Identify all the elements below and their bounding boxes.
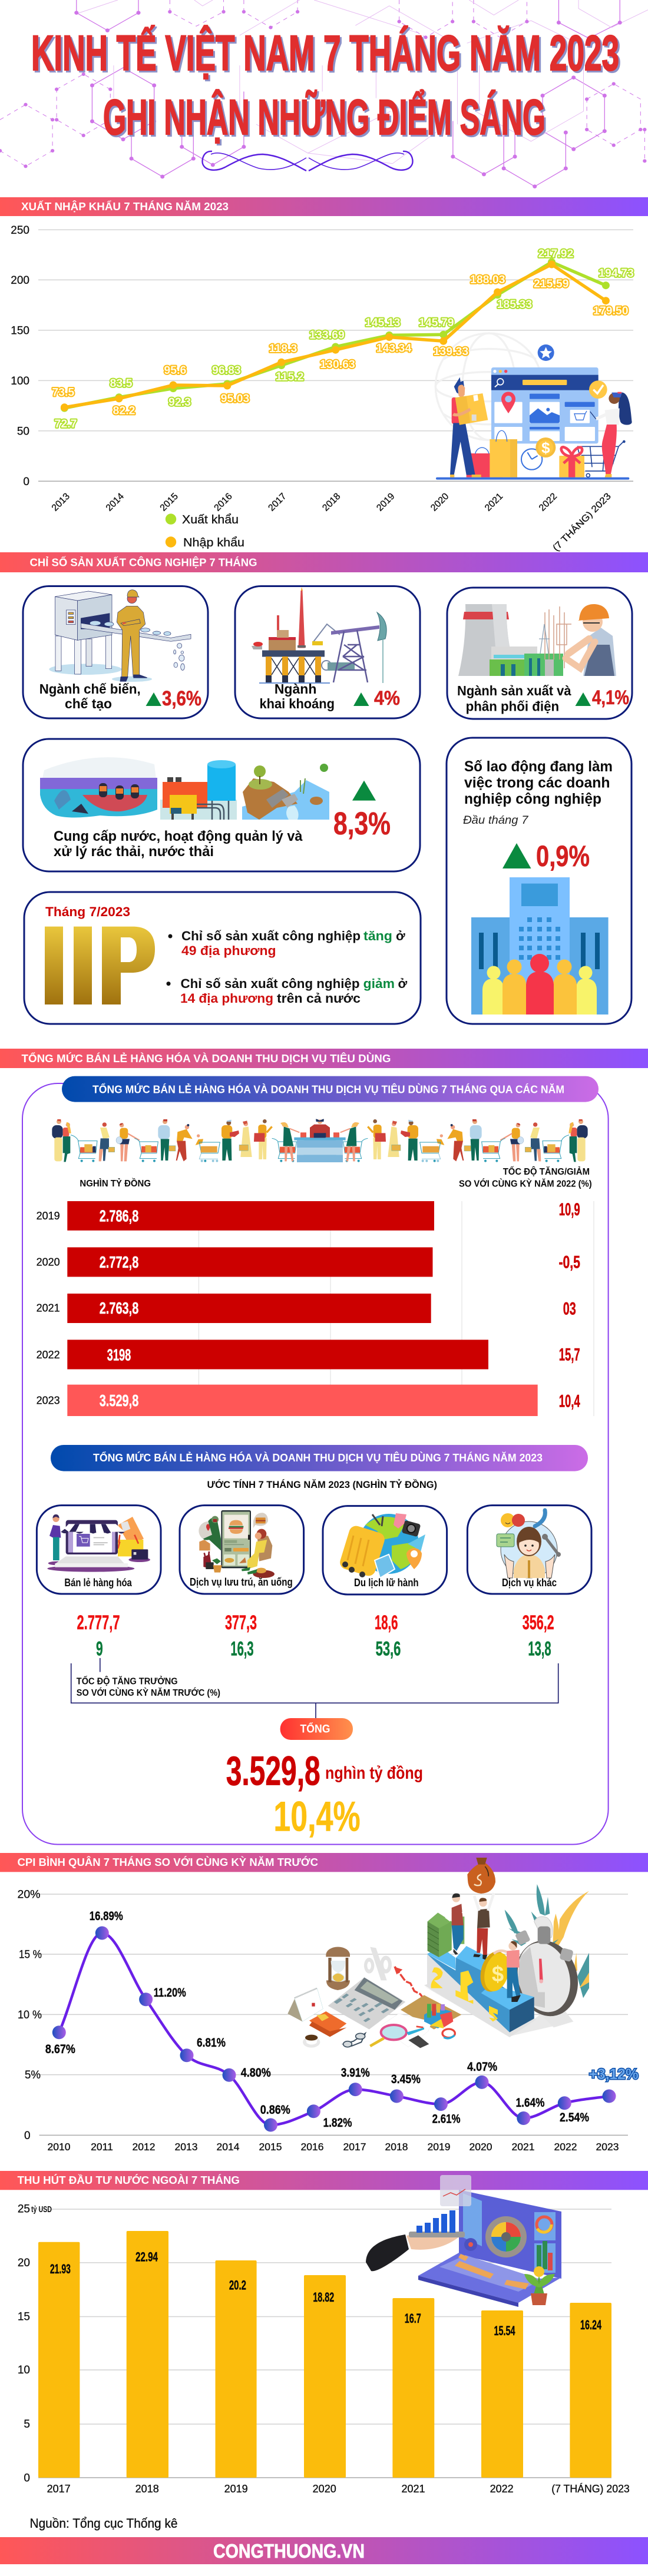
growth: 4,1%: 4,1% — [592, 687, 629, 709]
axis title: unit: NGHÌN TỶ ĐỒNG — [80, 1178, 151, 1189]
import value labels: 139.33 — [434, 345, 468, 358]
bar 2019: 10,9 — [559, 1200, 580, 1219]
title — [31, 25, 621, 147]
CPI year labels: 2011 — [91, 2141, 113, 2153]
import value labels: 95.6 — [164, 364, 187, 377]
chart grid and y axis: 250 — [11, 224, 29, 237]
panel: retail revenue — [22, 1076, 609, 1844]
note: growth rate: TỐC ĐỘ TĂNG TRƯỞNG — [77, 1676, 178, 1686]
panel: water and waste — [23, 739, 420, 871]
text: employment heading — [464, 758, 613, 807]
bar chart: FDI — [18, 2175, 630, 2495]
values: revenue by group: 18,6 — [375, 1612, 398, 1634]
text: manufacturing label: Ngành chế biến, — [39, 681, 141, 697]
chart grid and y axis: 0 — [23, 476, 29, 488]
CPI year labels: 2017 — [343, 2141, 366, 2153]
card: other services — [467, 1506, 591, 1594]
export value labels: 194.73 — [599, 267, 634, 280]
chart grid and y axis: 5 — [24, 2418, 30, 2431]
text: electricity label — [457, 683, 571, 714]
CPI value labels: 6.81% — [197, 2036, 226, 2050]
illustration: finance podium: $ — [492, 1962, 504, 1986]
CPI value labels: 11.20% — [154, 1986, 186, 2000]
heading pill: 2023 retail — [51, 1445, 588, 1471]
heading pill: yearly retail — [62, 1076, 599, 1102]
section header: bán lẻ — [0, 1049, 648, 1068]
CPI value labels: 3.45% — [391, 2073, 421, 2086]
FDI year labels: 2019 — [224, 2483, 248, 2495]
year axis labels: 2021 — [483, 491, 505, 513]
panel: IIP by locality — [24, 892, 421, 1024]
bar 2023: 3.529,8 — [100, 1391, 138, 1410]
text: employment heading: nghiệp công nghiệp — [464, 791, 601, 807]
bullet: provinces falling: trên cả nước — [277, 991, 361, 1006]
year axis labels: 2015 — [158, 491, 180, 513]
export value labels: 83.5 — [110, 377, 133, 390]
section header: CPI — [0, 1853, 648, 1872]
export value labels: 72.7 — [55, 417, 77, 430]
text: water and waste label — [54, 828, 303, 860]
total value: 3.529,8 — [226, 1748, 320, 1794]
CPI year labels: 2015 — [259, 2141, 282, 2153]
import value labels: 215.59 — [534, 277, 569, 290]
total pill — [280, 1718, 353, 1740]
connector bracket — [71, 1658, 558, 1718]
section header: bán lẻ: TỔNG MỨC BÁN LẺ HÀNG HÓA VÀ DOANH THU DỊCH VỤ TIÊU DÙNG — [21, 1052, 391, 1065]
bullet: provinces falling: ở — [398, 976, 408, 991]
values: revenue by group: 2.777,7 — [77, 1612, 120, 1634]
text: manufacturing label: chế tạo — [65, 696, 112, 711]
year axis labels: 2019 — [375, 491, 397, 513]
year axis labels: 2017 — [266, 491, 289, 513]
FDI value labels: 22.94 — [135, 2249, 158, 2264]
bar 2020: 2020 — [37, 1256, 60, 1268]
bar 2023 — [37, 1385, 580, 1416]
CPI value labels — [45, 1909, 639, 2130]
icon: oil rig and pump jack — [252, 587, 386, 683]
CPI year labels: 2013 — [175, 2141, 197, 2153]
bullet: provinces falling: 14 địa phương — [180, 991, 273, 1006]
section header: xuất nhập khẩu — [0, 197, 648, 216]
text: electricity label: phân phối điện — [466, 698, 559, 714]
growth: 4,1% — [575, 687, 629, 709]
bullet: provinces falling: Chỉ số sản xuất công nghiệp — [180, 976, 359, 991]
CPI value labels: 4.80% — [241, 2066, 271, 2080]
growth: 8,3% — [333, 781, 391, 841]
growth: 3,6%: 3,6% — [162, 687, 201, 710]
bar 2022: 2022 — [37, 1349, 60, 1361]
text: tourism label: Du lịch lữ hành — [354, 1577, 419, 1589]
bar 2022 — [37, 1340, 580, 1370]
CPI year labels: 2020 — [470, 2141, 492, 2153]
values: revenue by group: 377,3 — [225, 1612, 257, 1634]
subheading: ƯỚC TÍNH 7 THÁNG NĂM 2023 (NGHÌN TỶ ĐỒNG) — [207, 1479, 437, 1490]
CPI year labels: 2022 — [554, 2141, 577, 2153]
card: tourism — [323, 1506, 447, 1594]
bar 2021: 03 — [563, 1299, 576, 1319]
bullet: provinces rising: ở — [396, 929, 405, 943]
CPI value labels: 2.54% — [560, 2111, 589, 2124]
text: water and waste label: xử lý rác thải, nước thải — [54, 844, 214, 860]
icon: office building and workers — [471, 877, 609, 1015]
text: accommodation label: Dịch vụ lưu trú, ăn uống — [190, 1576, 293, 1588]
values: growth by group — [96, 1638, 551, 1660]
chart grid and y axis: 5% — [25, 2069, 41, 2081]
growth: 0,9%: 0,9% — [536, 840, 590, 873]
chart grid and y axis: 0 — [24, 2130, 31, 2142]
growth: 8,3%: 8,3% — [333, 806, 391, 841]
chart grid and y axis: 20% — [18, 1889, 41, 1901]
FDI value labels — [50, 2249, 601, 2338]
import value labels: 188.03 — [470, 273, 505, 286]
panel: industrial employment — [447, 738, 632, 1024]
total growth: 10,4% — [273, 1794, 361, 1841]
FDI bars — [38, 2231, 611, 2478]
import value labels: 118.3 — [269, 342, 297, 355]
year axis labels — [50, 490, 613, 553]
year axis labels: 2013 — [50, 491, 72, 513]
import value labels — [52, 273, 629, 417]
illustration: laptop analytics — [366, 2175, 561, 2307]
import value labels: 179.50 — [593, 304, 629, 317]
chart grid and y axis: 150 — [11, 325, 29, 337]
export value labels: 145.79 — [419, 316, 454, 329]
export line — [61, 258, 610, 412]
illustration: shoppers queue — [52, 1119, 588, 1162]
icon: conveyor worker — [49, 590, 191, 682]
export value labels: 145.13 — [365, 316, 401, 329]
import line — [61, 260, 610, 411]
panel: electricity — [447, 588, 632, 719]
legend: Xuất khẩu — [182, 513, 239, 526]
text: mining label: Ngành — [275, 681, 316, 697]
bullet: provinces rising: tăng — [363, 929, 392, 943]
bullet: provinces rising — [168, 929, 405, 958]
chart grid and y axis: 200 — [11, 274, 29, 287]
CPI line — [59, 1933, 609, 2125]
card: retail goods — [37, 1506, 161, 1594]
title flourish — [203, 151, 412, 171]
bar 2020: 2.772,8 — [100, 1253, 138, 1271]
text: month: Tháng 7/2023 — [45, 904, 130, 919]
growth: 4% — [353, 687, 400, 710]
FDI year labels: 2022 — [490, 2483, 514, 2495]
CPI year labels: 2023 — [596, 2141, 619, 2153]
bar 2021: 2021 — [37, 1302, 60, 1314]
bar 2022: 15,7 — [559, 1345, 580, 1365]
CPI year labels: 2018 — [385, 2141, 408, 2153]
import value labels: 143.34 — [376, 342, 411, 354]
import value labels: 82.2 — [113, 404, 135, 417]
CPI year labels — [48, 2141, 619, 2153]
text: water and waste label: Cung cấp nước, hoạt động quản lý và — [54, 828, 303, 844]
illustration: finance podium — [287, 1858, 589, 2048]
FDI year labels: 2018 — [135, 2483, 159, 2495]
bar 2019: 2.786,8 — [100, 1207, 138, 1225]
FDI value labels: 21.93 — [50, 2262, 71, 2276]
FDI value labels: 16.24 — [580, 2318, 601, 2332]
FDI value labels: 16.7 — [405, 2311, 421, 2326]
CPI data points — [52, 1927, 616, 2131]
section header: FDI: THU HÚT ĐẦU TƯ NƯỚC NGOÀI 7 THÁNG — [18, 2174, 240, 2186]
bar 2023: 2023 — [37, 1394, 60, 1406]
growth: 3,6% — [146, 687, 201, 710]
axis title: growth rate: SO VỚI CÙNG KỲ NĂM 2022 (%) — [459, 1179, 592, 1189]
year axis labels: 2022 — [537, 491, 559, 513]
section header: FDI — [0, 2171, 648, 2190]
FDI year labels: 2021 — [401, 2483, 425, 2495]
year axis labels: (7 THÁNG) 2023 — [550, 490, 613, 553]
text: mining label: khai khoáng — [259, 696, 335, 711]
bullet: provinces rising: 49 địa phương — [181, 943, 276, 958]
year axis labels: 2014 — [104, 491, 126, 513]
line chart: export and import — [11, 224, 634, 553]
panel: mining — [235, 586, 420, 718]
import value labels: 95.03 — [221, 392, 250, 405]
export value labels: 92.3 — [168, 396, 191, 409]
icon: treatment plant — [160, 760, 237, 820]
bar 2021: 2.763,8 — [100, 1299, 138, 1317]
total value — [226, 1748, 423, 1794]
chart grid and y axis: 50 — [17, 425, 29, 438]
CPI year labels: 2012 — [133, 2141, 155, 2153]
bar 2019: 2019 — [37, 1210, 60, 1222]
CPI value labels: 16.89% — [90, 1909, 123, 1923]
card: accommodation and food — [180, 1506, 304, 1594]
heading pill: yearly retail: TỔNG MỨC BÁN LẺ HÀNG HÓA VÀ DOANH THU DỊCH VỤ TIÊU DÙNG 7 THÁNG QUA CÁC NĂM — [92, 1083, 564, 1095]
CPI value labels: 8.67% — [45, 2043, 75, 2056]
CPI year labels: 2021 — [512, 2141, 534, 2153]
FDI year labels — [47, 2483, 630, 2495]
export value labels: 185.33 — [497, 298, 532, 311]
FDI year labels: 2020 — [313, 2483, 336, 2495]
bar 2023: 10,4 — [559, 1392, 580, 1411]
section header: xuất nhập khẩu: XUẤT NHẬP KHẨU 7 THÁNG NĂM 2023 — [21, 200, 229, 213]
icon: food delivery app — [199, 1510, 275, 1578]
export value labels: 217.92 — [538, 247, 573, 260]
bar 2019 — [37, 1200, 580, 1231]
export value labels: 115.2 — [276, 370, 304, 383]
text: other services label: Dịch vụ khác — [502, 1577, 557, 1589]
year axis labels: 2020 — [429, 491, 451, 513]
section header: chỉ số sản xuất công nghiệp — [0, 552, 648, 572]
FDI value labels: 20.2 — [229, 2278, 246, 2293]
CPI value labels: 4.07% — [467, 2060, 497, 2074]
IIP lettering — [45, 927, 155, 1004]
chart grid and y axis — [18, 1889, 628, 2142]
text: period note: Đầu tháng 7 — [463, 814, 529, 827]
chart grid and y axis: 15 % — [19, 1949, 42, 1961]
axis title: growth rate: TỐC ĐỘ TĂNG/GIẢM — [503, 1166, 590, 1177]
chart grid and y axis — [11, 224, 633, 488]
CPI year labels: 2019 — [428, 2141, 450, 2153]
panel: manufacturing — [23, 586, 208, 718]
bullet: provinces falling: giảm — [363, 976, 395, 991]
chart grid and y axis: tỷ USD — [31, 2204, 52, 2214]
CPI year labels: 2014 — [217, 2141, 240, 2153]
export value labels: 133.69 — [309, 329, 345, 342]
bar 2022: 3198 — [107, 1346, 131, 1364]
section header: CPI: CPI BÌNH QUÂN 7 THÁNG SO VỚI CÙNG KỲ NĂM TRƯỚC — [18, 1856, 318, 1868]
bullet: provinces falling — [166, 976, 408, 1006]
legend — [166, 513, 244, 549]
import value labels: 73.5 — [52, 386, 74, 399]
values: growth by group: 9 — [96, 1638, 103, 1660]
chart grid and y axis: 10 % — [18, 2009, 42, 2021]
total value: nghìn tỷ đồng — [325, 1763, 423, 1783]
icon: customer service woman — [497, 1510, 561, 1578]
bar 2020: -0,5 — [558, 1253, 580, 1272]
chart grid and y axis: 0 — [24, 2472, 30, 2485]
note: growth rate — [77, 1676, 220, 1698]
footer: CONGTHUONG.VN — [213, 2540, 365, 2562]
section header: chỉ số sản xuất công nghiệp: CHỈ SỐ SẢN XUẤT CÔNG NGHIỆP 7 THÁNG — [29, 556, 257, 569]
axis title: growth rate — [459, 1166, 592, 1189]
line chart: CPI — [18, 1858, 639, 2153]
legend: Nhập khẩu — [183, 536, 244, 549]
CPI year labels: 2016 — [301, 2141, 323, 2153]
total pill: TỔNG — [300, 1723, 330, 1736]
CPI value labels: 3.91% — [341, 2066, 370, 2080]
values: growth by group: 16,3 — [230, 1638, 254, 1660]
export value labels: 96.83 — [212, 364, 241, 377]
icon: wastewater island — [242, 764, 329, 820]
FDI year labels: (7 THÁNG) 2023 — [551, 2483, 630, 2495]
icon: river cleanup — [40, 757, 157, 817]
values: revenue by group: 356,2 — [523, 1612, 554, 1634]
bar 2020 — [37, 1247, 580, 1277]
import value labels: 130.63 — [320, 358, 355, 371]
heading pill: 2023 retail: TỔNG MỨC BÁN LẺ HÀNG HÓA VÀ DOANH THU DỊCH VỤ TIÊU DÙNG 7 THÁNG NĂM 2023 — [93, 1451, 543, 1464]
CPI value labels: 2.61% — [432, 2113, 461, 2126]
year axis labels: 2018 — [320, 491, 343, 513]
chart grid and y axis: 10 — [18, 2364, 30, 2376]
bar chart: retail by year — [37, 1200, 594, 1416]
CPI value labels: 0.86% — [260, 2103, 290, 2117]
icon: travel globe — [338, 1513, 425, 1578]
growth: 0,9% — [502, 840, 590, 873]
chart grid and y axis — [18, 2203, 611, 2485]
values: growth by group: 53,6 — [376, 1638, 401, 1660]
CPI value labels: 1.82% — [323, 2116, 352, 2130]
text: employment heading: việc trong các doanh — [464, 775, 610, 791]
text: retail goods label: Bán lẻ hàng hóa — [64, 1577, 133, 1589]
icon: power plant and electrician — [458, 604, 616, 676]
chart grid and y axis: 25 — [18, 2203, 30, 2215]
chart grid and y axis: 15 — [18, 2310, 30, 2323]
illustration: online shopping: $ — [541, 439, 550, 456]
note: growth rate: SO VỚI CÙNG KỲ NĂM TRƯỚC (%) — [77, 1688, 220, 1698]
text: electricity label: Ngành sản xuất và — [457, 683, 571, 698]
footer — [0, 2537, 648, 2564]
FDI value labels: 18.82 — [313, 2290, 334, 2305]
values: growth by group: 13,8 — [528, 1638, 551, 1660]
text: manufacturing label — [39, 681, 141, 711]
bar 2021 — [37, 1294, 576, 1323]
CPI value labels: +3,12% — [589, 2066, 639, 2083]
icon: online store — [47, 1514, 150, 1572]
illustration: online shopping — [435, 333, 632, 480]
year axis labels: 2016 — [213, 491, 234, 513]
bullet: provinces rising: Chỉ số sản xuất công nghiệp — [181, 929, 361, 943]
values: revenue by group — [77, 1612, 554, 1634]
chart grid and y axis: 100 — [11, 375, 29, 387]
export value labels — [55, 247, 634, 430]
FDI year labels: 2017 — [47, 2483, 71, 2495]
text: mining label — [259, 681, 335, 711]
growth: 4%: 4% — [374, 687, 400, 710]
FDI value labels: 15.54 — [494, 2323, 515, 2338]
source note: Nguồn: Tổng cục Thống kê — [29, 2516, 178, 2531]
chart grid and y axis: 20 — [18, 2257, 30, 2269]
CPI value labels: 1.64% — [516, 2096, 545, 2110]
CPI year labels: 2010 — [48, 2141, 71, 2153]
text: employment heading: Số lao động đang làm — [464, 758, 613, 775]
